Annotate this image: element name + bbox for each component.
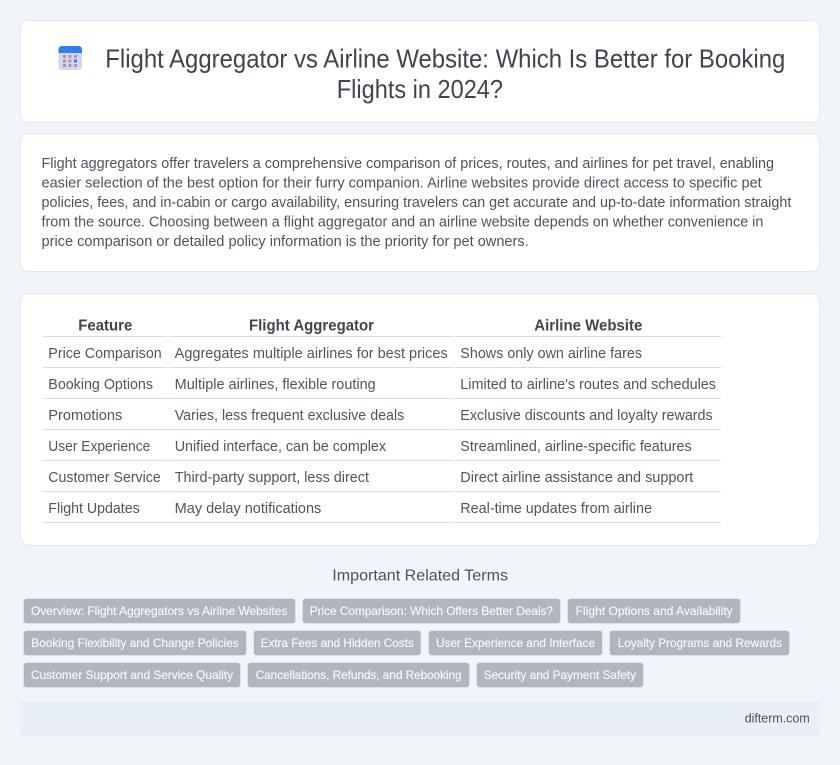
- icon: calendar: [58, 46, 82, 70]
- tag: cancellations: [248, 662, 470, 688]
- tag: price comparison: [302, 598, 560, 624]
- table row: flight updates: Flight Updates: [48, 501, 140, 517]
- tag: overview: Overview: Flight Aggregators vs Airline Websites: [31, 604, 287, 618]
- tag: loyalty programs: Loyalty Programs and Rewards: [618, 636, 782, 650]
- table row: customer service: Customer Service: [48, 470, 161, 486]
- tag: overview: [24, 598, 296, 624]
- footer credit: difterm.com: [745, 710, 810, 725]
- tag: flight options: Flight Options and Availability: [576, 604, 733, 618]
- table row: user experience: Unified interface, can be complex: [175, 439, 387, 455]
- tag: booking flexibility: [24, 630, 246, 656]
- tag: cancellations: Cancellations, Refunds, and Rebooking: [256, 668, 462, 682]
- tag: security: Security and Payment Safety: [484, 668, 636, 682]
- panel: comparison table: [20, 294, 820, 546]
- tag: customer support: Customer Support and Service Quality: [31, 668, 233, 682]
- table row: price comparison: Aggregates multiple airlines for best prices: [175, 346, 448, 362]
- table row: booking options: Booking Options: [48, 377, 153, 393]
- tag: loyalty programs: [610, 630, 790, 656]
- text block: intro: policies, fees, and in-cabin or cargo availability, ensuring travelers can get accurate and up-to-date information straight: [42, 195, 791, 211]
- table row: price comparison: [48, 346, 642, 362]
- related term tags: [24, 598, 790, 688]
- text block: intro: easier selection of the best option for their furry companion. Airline websites provide direct access to specific pet: [42, 176, 762, 192]
- table row: booking options: Limited to airline's routes and schedules: [460, 377, 716, 393]
- text block: intro: from the source. Choosing between a flight aggregator and an airline website depends on whether convenience in: [42, 214, 763, 230]
- table row: user experience: Streamlined, airline-specific features: [460, 439, 692, 455]
- text block: intro: Flight aggregators offer travelers a comprehensive comparison of prices, routes, and airlines for pet travel, enabling: [42, 156, 774, 172]
- table header row: [78, 318, 643, 334]
- panel: intro paragraph: [20, 134, 820, 272]
- table row: customer service: [48, 470, 693, 486]
- tag: customer support: [24, 662, 240, 688]
- table header row: Flight Aggregator: [249, 318, 374, 334]
- tag: extra fees: Extra Fees and Hidden Costs: [261, 636, 414, 650]
- table header row: Feature: [78, 318, 133, 334]
- panel: title header: [20, 20, 820, 122]
- text block: intro: price comparison or detailed policy information is the priority for pet owners.: [42, 234, 529, 250]
- tag: user experience: [428, 630, 602, 656]
- tag: price comparison: Price Comparison: Which Offers Better Deals?: [310, 604, 553, 618]
- table row: promotions: Exclusive discounts and loyalty rewards: [460, 408, 713, 424]
- table row: price comparison: Shows only own airline fares: [460, 346, 642, 362]
- table row: customer service: Third-party support, less direct: [175, 470, 369, 486]
- table row: customer service: Direct airline assistance and support: [460, 470, 693, 486]
- tag: flight options: [568, 598, 740, 624]
- table row: flight updates: [48, 501, 652, 517]
- table row: promotions: [48, 408, 713, 424]
- heading: important related terms: Important Related Terms: [332, 568, 508, 585]
- footer bar: [20, 701, 820, 735]
- table row: price comparison: Price Comparison: [48, 346, 162, 362]
- table row: promotions: Promotions: [48, 408, 122, 424]
- table row: promotions: Varies, less frequent exclusive deals: [175, 408, 404, 424]
- title: [105, 46, 785, 104]
- tag: extra fees: [254, 630, 421, 656]
- table row: flight updates: May delay notifications: [175, 501, 321, 517]
- tag: booking flexibility: Booking Flexibility and Change Policies: [31, 636, 239, 650]
- table header row: Airline Website: [534, 318, 643, 334]
- table row: user experience: [48, 439, 692, 455]
- table row: booking options: [48, 377, 716, 393]
- table row: flight updates: Real-time updates from airline: [460, 501, 652, 517]
- text block: intro: [42, 156, 791, 250]
- title: Flights in 2024?: [337, 76, 503, 104]
- table row: user experience: User Experience: [48, 439, 150, 455]
- tag: user experience: User Experience and Interface: [436, 636, 595, 650]
- title: Flight Aggregator vs Airline Website: Which Is Better for Booking: [105, 46, 785, 74]
- table row: booking options: Multiple airlines, flexible routing: [175, 377, 376, 393]
- tag: security: [476, 662, 644, 688]
